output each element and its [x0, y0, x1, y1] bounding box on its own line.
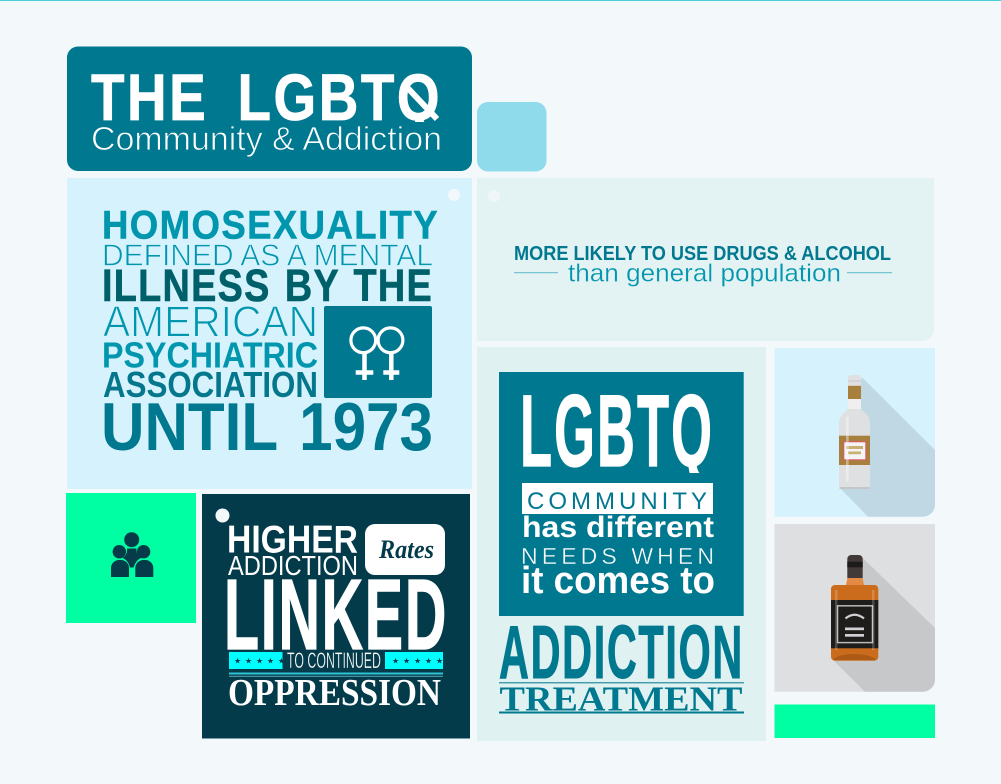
text: than general population: than general population: [568, 260, 841, 288]
title heading: THE LGBTQ: [91, 60, 442, 134]
text: addiction: ADDICTION: [228, 550, 358, 581]
badge: rates: Rates: [378, 535, 434, 564]
decorative light blue tile: [477, 102, 546, 172]
text: needs when: NEEDS WHEN: [521, 543, 714, 569]
text: oppression: OPPRESSION: [228, 672, 441, 714]
icon: double venus symbol: [324, 306, 432, 398]
title subheading: Community & Addiction: [91, 120, 442, 157]
text: to continued: TO CONTINUED: [287, 648, 381, 673]
text: has different: has different: [522, 511, 714, 544]
text: higher: HIGHER: [227, 519, 358, 562]
star bar left: [229, 652, 289, 669]
text: association: ASSOCIATION: [103, 364, 318, 405]
panel: more likely to use: [477, 178, 934, 341]
star bar right: ★★★★★: [392, 656, 447, 666]
text: addiction: ADDICTION: [499, 610, 744, 694]
text: illness by the: ILLNESS BY THE: [102, 260, 433, 311]
panel: addiction treatment: [477, 347, 766, 741]
panel: green people tile: [66, 493, 196, 623]
panel: title: [67, 46, 472, 171]
badge: rates: [365, 524, 445, 575]
text: more likely to use drugs and alcohol: MORE LIKELY TO USE DRUGS & ALCOHOL: [514, 243, 891, 265]
text: homosexuality: HOMOSEXUALITY: [102, 203, 439, 247]
text: treatment: TREATMENT: [500, 680, 742, 719]
decorative green bar: [774, 704, 935, 738]
text: linked: LINKED: [224, 559, 448, 671]
label: community: COMMUNITY: [527, 488, 707, 515]
panel: whiskey bottle: [774, 524, 935, 692]
star bar left: ★★★★★: [234, 656, 289, 666]
text: defined as a mental: DEFINED AS A MENTAL: [102, 238, 433, 273]
panel: higher addiction rates: [202, 494, 470, 738]
icon: group of people: [111, 532, 153, 577]
card: lgbtq community: [499, 372, 744, 616]
panel: white spirit bottle: [774, 348, 935, 517]
icon: whiskey bottle: [831, 555, 878, 661]
text: until 1973: UNTIL 1973: [101, 389, 433, 465]
text: psychiatric: PSYCHIATRIC: [102, 335, 318, 376]
icon: white bottle: [839, 375, 870, 489]
text: lgbtq: LGBTQ: [520, 374, 714, 488]
panel: homosexuality history: [67, 178, 472, 489]
text: it comes to: it comes to: [521, 560, 715, 602]
text: american: AMERICAN: [103, 298, 318, 347]
star bar right: [385, 652, 447, 669]
